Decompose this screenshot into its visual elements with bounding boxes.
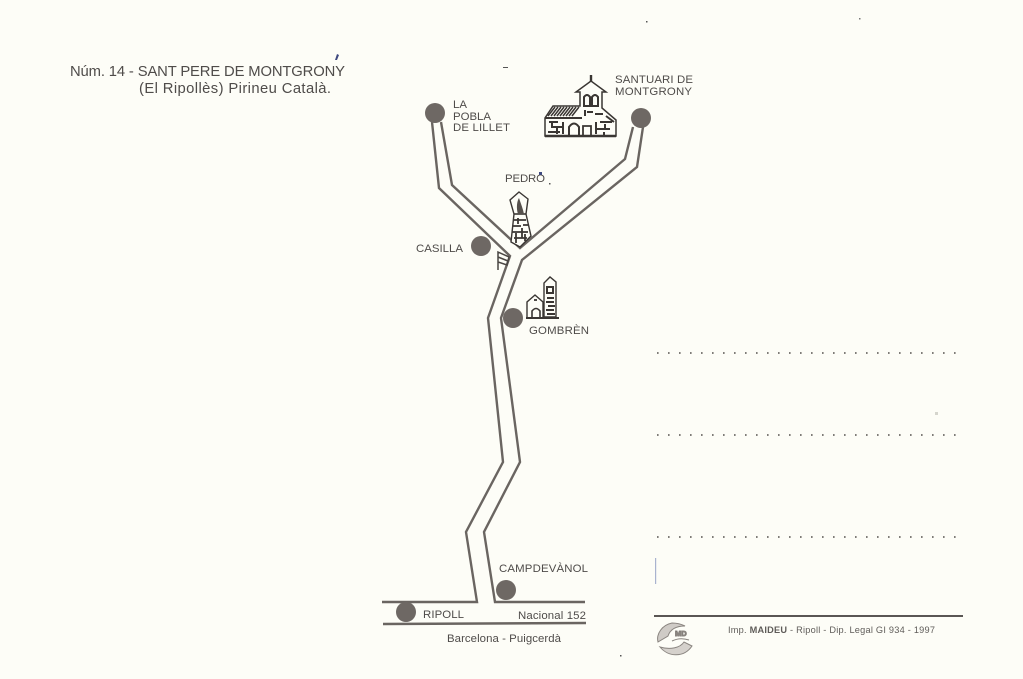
footer rule: [654, 615, 963, 617]
imprint text: Imp. MAIDEU - Ripoll - Dip. Legal GI 934 - 1997: [728, 625, 935, 635]
label: La Pobla de Lillet: [453, 99, 510, 134]
label: Santuari de Montgrony: [615, 74, 693, 98]
marker: Gombrèn: [503, 308, 523, 328]
icon: printer logo: MD: [675, 629, 687, 638]
label: La Pobla de Lillet: POBLA: [453, 111, 491, 123]
marker: La Pobla de Lillet: [425, 103, 445, 123]
marker: Casilla: [471, 236, 491, 256]
label: Santuari de Montgrony: SANTUARI DE: [615, 74, 693, 86]
title: [70, 64, 345, 97]
road: Nacional 152 lower edge: [383, 623, 586, 624]
marker: Campdevànol: [496, 580, 516, 600]
label: Casilla: CASILLA: [416, 243, 463, 255]
road: centre edge of the fork: [441, 122, 633, 248]
label: Pedró: PEDRÓ: [505, 172, 545, 185]
label: Gombrèn: GOMBRÈN: [529, 324, 589, 337]
icon: Gombrèn church and tower: [526, 277, 559, 318]
label: Nacional 152: Nacional 152: [518, 610, 586, 622]
icon: Santuari de Montgrony church: [545, 75, 616, 136]
road: left and lower edge: [382, 122, 510, 602]
label: La Pobla de Lillet: LA: [453, 99, 467, 111]
town markers: [396, 103, 651, 622]
road: right edge: [484, 127, 643, 602]
label: Santuari de Montgrony: MONTGRONY: [615, 86, 692, 98]
title: Núm. 14 - SANT PERE DE MONTGRONY: [70, 64, 345, 80]
icon: Casilla hut: [498, 252, 509, 270]
map labels: [416, 74, 693, 645]
road map: [382, 122, 643, 624]
label: La Pobla de Lillet: DE LILLET: [453, 122, 510, 134]
label: Barcelona - Puigcerdà: Barcelona - Puigcerdà: [447, 633, 562, 645]
address lines: [657, 353, 956, 537]
paper specks: [335, 18, 938, 656]
icon: Pedró wayside shrine: [510, 192, 531, 247]
marker: Santuari de Montgrony: [631, 108, 651, 128]
label: Campdevànol: CAMPDEVÀNOL: [499, 562, 588, 575]
title: (El Ripollès) Pirineu Català.: [139, 81, 331, 97]
marker: Ripoll: [396, 602, 416, 622]
icon: printer logo: [658, 623, 692, 655]
label: Ripoll: RIPOLL: [423, 609, 464, 621]
